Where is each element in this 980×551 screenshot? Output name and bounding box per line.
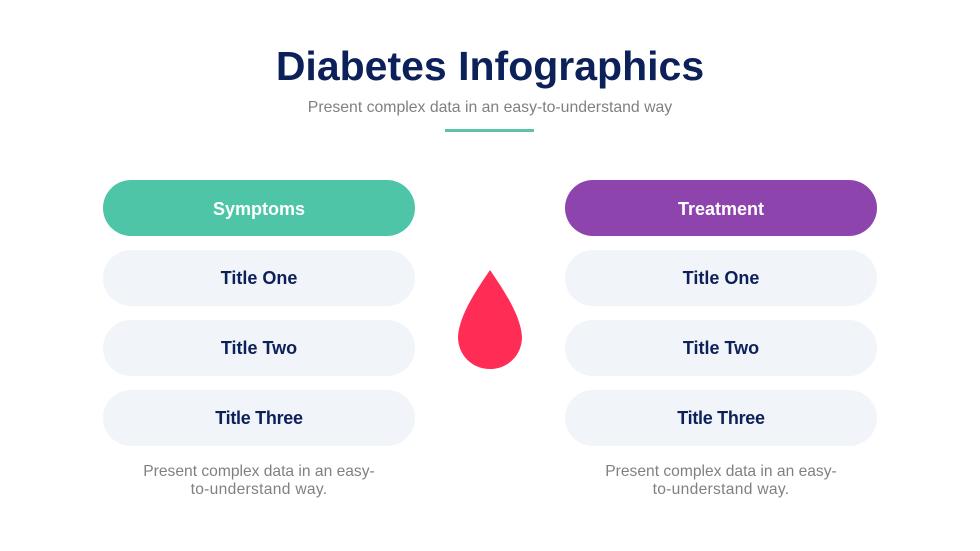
symptoms description: to-understand way. bbox=[191, 481, 327, 498]
treatment description bbox=[605, 463, 837, 498]
subtitle: Present complex data in an easy-to-understand way bbox=[308, 98, 672, 116]
symptoms title one bbox=[103, 250, 415, 306]
treatment header: Treatment bbox=[678, 199, 764, 219]
symptoms title three: Title Three bbox=[215, 408, 303, 428]
treatment title two: Title Two bbox=[683, 338, 759, 358]
symptoms title one: Title One bbox=[221, 268, 297, 288]
panel: symptoms bbox=[103, 180, 415, 498]
treatment title one: Title One bbox=[683, 268, 759, 288]
symptoms title two bbox=[103, 320, 415, 376]
symptoms header: Symptoms bbox=[213, 199, 305, 219]
treatment title three: Title Three bbox=[677, 408, 765, 428]
treatment title two bbox=[565, 320, 877, 376]
treatment title one bbox=[565, 250, 877, 306]
symptoms description bbox=[143, 463, 375, 498]
panel: treatment bbox=[565, 180, 877, 498]
symptoms header bbox=[103, 180, 415, 236]
symptoms title three bbox=[103, 390, 415, 446]
treatment title three bbox=[565, 390, 877, 446]
treatment description: Present complex data in an easy- bbox=[605, 463, 837, 480]
treatment description: to-understand way. bbox=[653, 481, 789, 498]
treatment header bbox=[565, 180, 877, 236]
title: Diabetes Infographics bbox=[276, 43, 704, 89]
title underline bbox=[445, 129, 534, 132]
symptoms description: Present complex data in an easy- bbox=[143, 463, 375, 480]
symptoms title two: Title Two bbox=[221, 338, 297, 358]
icon: blood drop bbox=[458, 270, 522, 369]
